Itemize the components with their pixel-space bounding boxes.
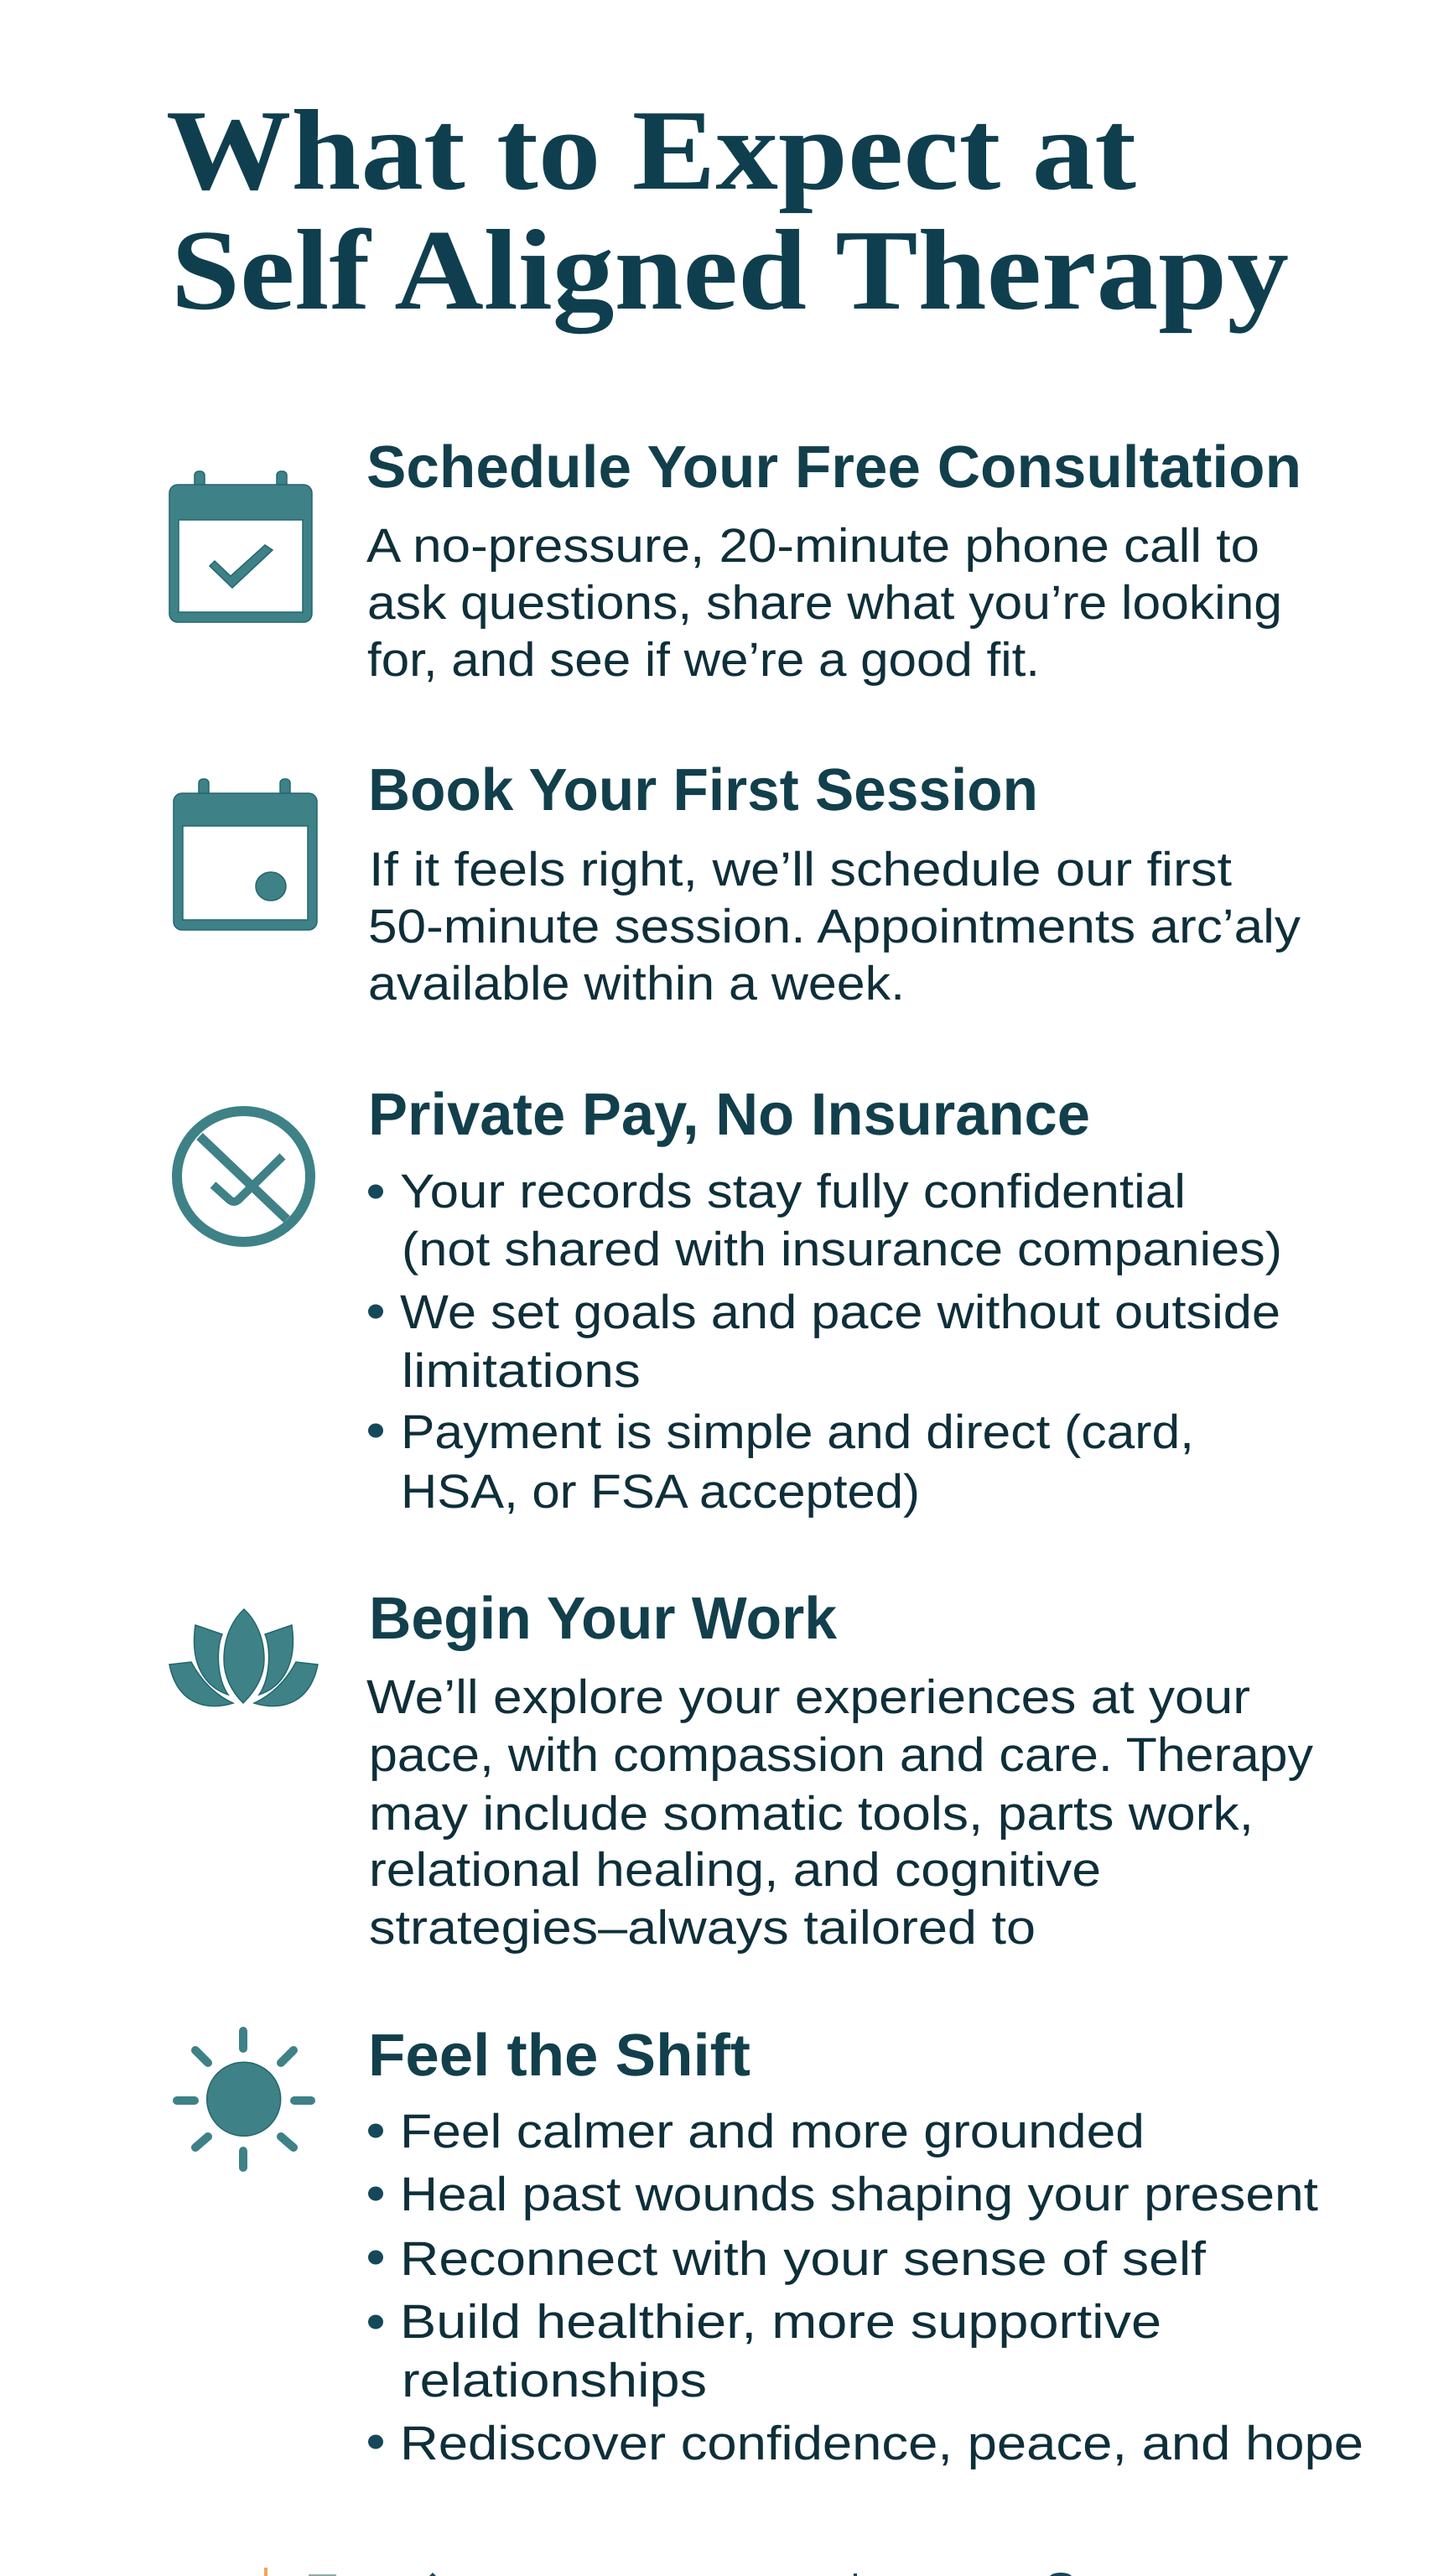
list: therapy outcomes: Feel calmer and more grounded [400,2105,1145,2158]
list: private pay benefits: We set goals and pace without outside [400,1285,1280,1339]
text block: therapy description: pace, with compassion and care. Therapy [369,1728,1314,1782]
text block: therapy description: may include somatic tools, parts work, [369,1787,1254,1841]
list: private pay benefits: (not shared with insurance companies) [402,1223,1282,1276]
icon: crossed-out check mark in circle [177,1111,310,1242]
list: therapy outcomes: Reconnect with your sense of self [400,2232,1206,2286]
text block: consultation description: ask questions, share what you’re looking [367,576,1282,630]
text block: therapy description: strategies–always tailored to [369,1901,1036,1955]
cropped footer heading remnants [264,2568,1072,2576]
icon: lotus flower [169,1609,318,1706]
text block: first session description [368,843,1301,1010]
list: therapy outcomes: Build healthier, more supportive [400,2295,1161,2349]
panel: schedule your free consultation [169,434,1301,687]
text block: therapy description [366,1670,1314,1955]
text block: consultation description: for, and see if we’re a good fit. [367,633,1040,687]
text block: first session description: 50-minute session. Appointments arc’aly [368,900,1301,953]
icon: calendar with check mark [169,471,312,622]
text block: consultation description: A no-pressure, 20-minute phone call to [366,519,1259,573]
text block: first session description: If it feels right, we’ll schedule our first [369,843,1232,896]
list: therapy outcomes [368,2105,1363,2470]
panel: feel the shift [177,2023,1363,2470]
panel: private pay, no insurance [177,1082,1282,1519]
text block: therapy description: relational healing, and cognitive [369,1843,1101,1897]
icon: calendar with dot [174,779,317,930]
text block: therapy description: We’ll explore your experiences at your [366,1670,1250,1724]
text block: first session description: available within a week. [368,957,905,1010]
heading: schedule your free consultation: Schedule Your Free Consultation [366,434,1301,501]
panel: book your first session [174,757,1301,1010]
panel: begin your work [169,1586,1314,1955]
title: What to Expect at [166,86,1136,214]
heading: private pay, no insurance: Private Pay, No Insurance [368,1082,1090,1148]
list: therapy outcomes: Heal past wounds shaping your present [400,2168,1318,2221]
list: private pay benefits: limitations [402,1344,641,1398]
heading: begin your work: Begin Your Work [369,1586,837,1652]
title: Self Aligned Therapy [171,206,1289,335]
text block: consultation description [366,519,1282,687]
list: therapy outcomes: Rediscover confidence, peace, and hope [400,2417,1363,2470]
icon: sun [177,2031,311,2168]
list: private pay benefits: Payment is simple and direct (card, [401,1405,1194,1459]
list: private pay benefits: Your records stay fully confidential [400,1165,1186,1218]
title [166,86,1289,335]
list: private pay benefits: HSA, or FSA accepted) [401,1465,920,1519]
list: private pay benefits [368,1165,1282,1519]
list: therapy outcomes: relationships [402,2354,707,2407]
heading: book your first session: Book Your First Session [368,757,1038,823]
heading: feel the shift: Feel the Shift [368,2023,750,2089]
